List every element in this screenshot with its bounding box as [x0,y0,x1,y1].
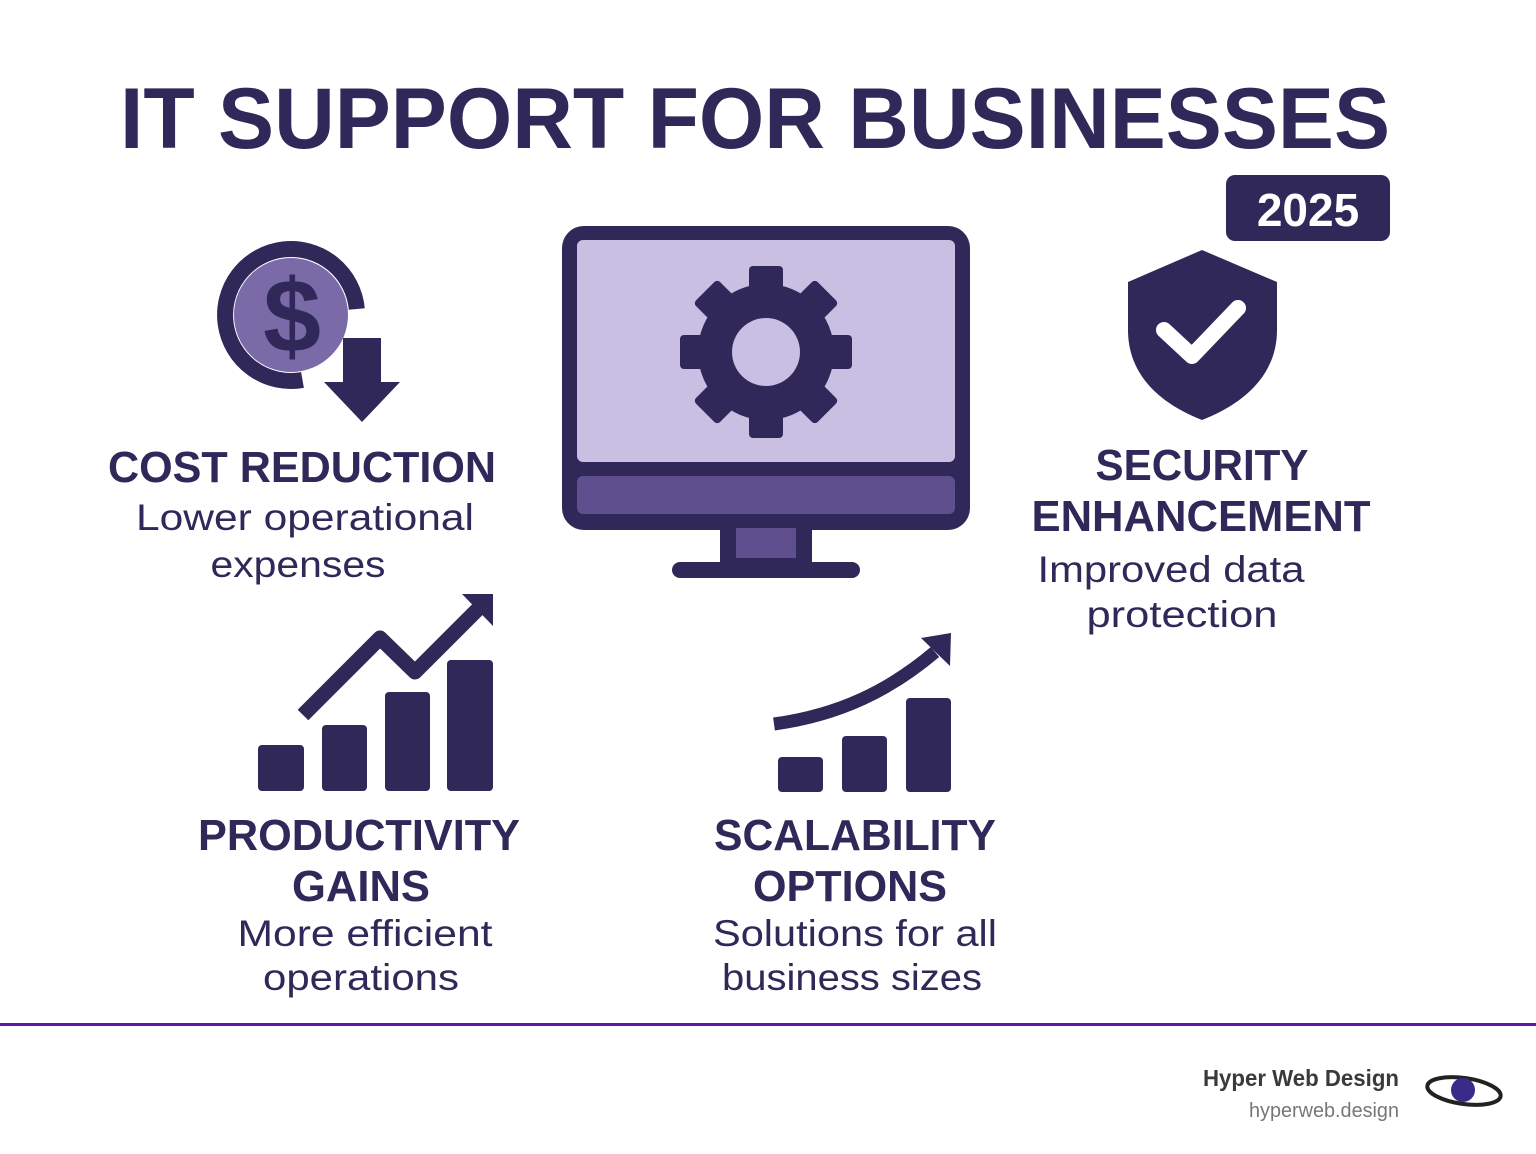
heading: scalability options: business sizes [722,957,982,998]
footer brand text: hyperweb.design [1249,1100,1399,1122]
icon: shield [1128,250,1277,420]
icon: cost reduction dollar [225,249,400,422]
icon: scalability chart [774,633,951,792]
heading: security enhancement: SECURITY [1096,441,1308,490]
heading: security enhancement [1032,441,1371,635]
heading: security enhancement: ENHANCEMENT [1032,492,1371,541]
footer brand text [1203,1065,1399,1122]
icon: cost reduction dollar: $ [263,259,321,375]
badge: 2025 [1226,175,1390,241]
heading: productivity gains: PRODUCTIVITY [198,811,520,860]
heading: scalability options: OPTIONS [753,862,947,911]
icon: productivity chart [258,594,493,791]
heading: scalability options: Solutions for all [713,913,997,954]
heading: productivity gains: operations [263,957,459,998]
footer brand text: Hyper Web Design [1203,1065,1399,1091]
icon: monitor with gear [562,226,970,578]
heading: cost reduction: expenses [210,544,386,585]
heading: cost reduction: Lower operational [136,497,474,538]
badge: 2025: 2025 [1257,184,1359,236]
heading: scalability options: SCALABILITY [714,811,996,860]
footer logo [1426,1073,1502,1109]
heading: cost reduction: COST REDUCTION [108,443,496,492]
heading: security enhancement: protection [1086,594,1278,635]
heading: cost reduction [108,443,496,585]
title: IT SUPPORT FOR BUSINESSES [120,71,1390,167]
heading: productivity gains: GAINS [292,862,430,911]
heading: scalability options [713,811,997,998]
heading: productivity gains [198,811,520,998]
heading: productivity gains: More efficient [238,913,493,954]
heading: security enhancement: Improved data [1038,549,1305,590]
